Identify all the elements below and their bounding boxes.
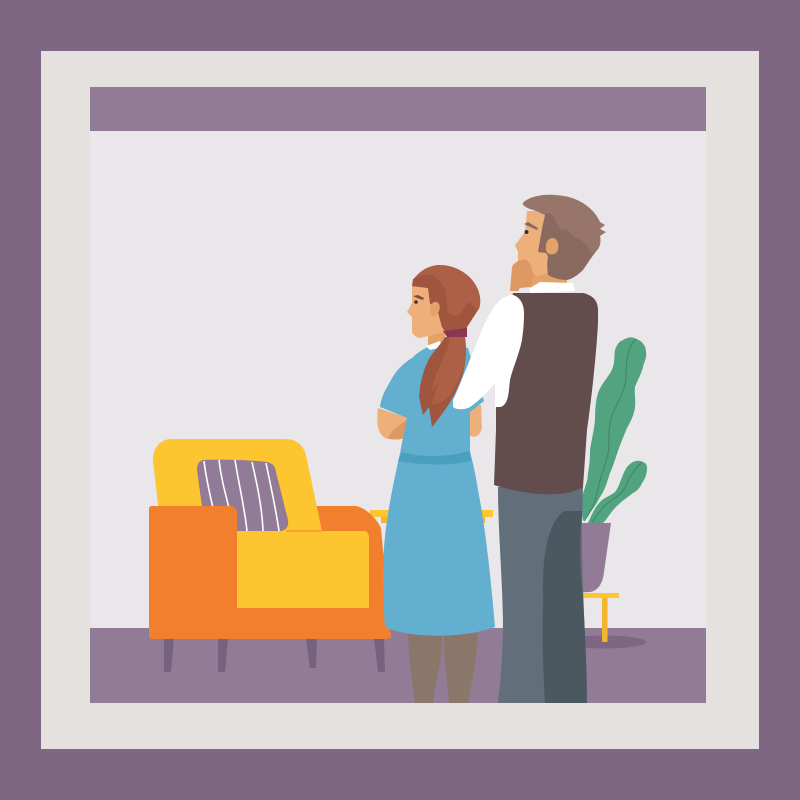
vest — [494, 293, 598, 494]
trousers — [498, 487, 587, 703]
potted plant — [570, 337, 647, 593]
face — [515, 211, 558, 276]
collar — [530, 282, 575, 293]
orange seat cover line — [286, 530, 322, 532]
chair legs — [164, 638, 174, 672]
woman body — [377, 325, 495, 703]
woman head — [407, 265, 480, 427]
man — [494, 195, 606, 703]
eye and brow — [524, 222, 538, 234]
collar — [426, 341, 442, 350]
large leaf — [582, 337, 646, 521]
man sleeve — [453, 295, 524, 409]
inner light frame — [41, 51, 759, 749]
striped pillow — [197, 460, 288, 531]
side table top — [370, 510, 493, 523]
plant shadow — [562, 636, 646, 648]
dress — [380, 343, 495, 636]
chair back rear frame — [236, 506, 391, 638]
plant table — [570, 593, 619, 642]
ear — [546, 238, 558, 254]
face — [407, 286, 443, 338]
dress belt — [398, 451, 471, 464]
hair light top — [523, 195, 606, 254]
near arm — [377, 408, 408, 440]
floor — [90, 628, 706, 703]
ear — [430, 302, 440, 316]
hand at chin — [510, 259, 533, 291]
hair dark back — [530, 208, 600, 280]
neck — [428, 325, 445, 345]
small leaf — [588, 461, 647, 523]
arm shadow — [388, 420, 407, 440]
hair dark — [412, 275, 478, 331]
far arm — [470, 405, 482, 437]
hair light — [412, 265, 480, 331]
orange front arm — [149, 506, 391, 639]
neck — [530, 262, 567, 292]
hair tie — [443, 328, 467, 337]
ponytail — [419, 337, 466, 427]
legs — [408, 634, 442, 703]
pot — [570, 523, 611, 593]
trouser shadow leg — [543, 511, 587, 703]
armchair — [149, 439, 391, 672]
eye and brow — [413, 295, 424, 304]
room wall — [90, 131, 706, 629]
ponytail highlight — [432, 337, 466, 404]
ceiling band — [90, 87, 706, 131]
yellow backrest — [153, 439, 322, 531]
yellow seat cushion — [236, 531, 369, 608]
